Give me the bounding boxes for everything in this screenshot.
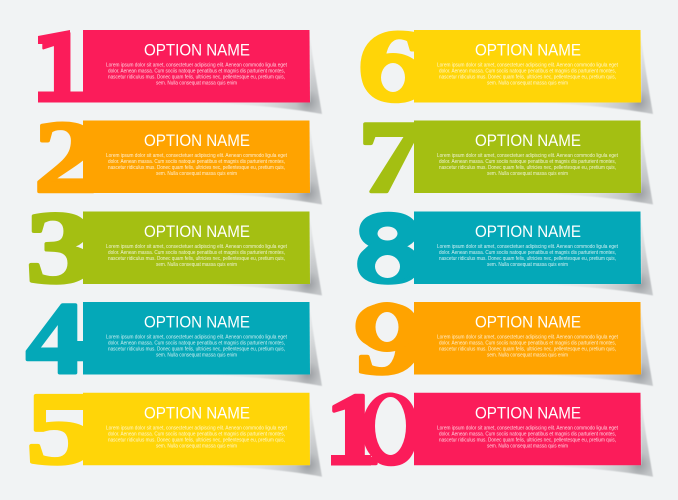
body text 5: sem. Nulla consequat massa quis enim [156, 443, 237, 449]
panel: option 10 [325, 373, 653, 486]
number 2: 2 [34, 101, 98, 214]
ribbon 1 [83, 30, 322, 114]
number 8: 8 [355, 191, 422, 304]
body text 6: Lorem ipsum dolor sit amet, consectetuer adipiscing elit. Aenean commodo ligula eget [437, 63, 619, 69]
panel: option 9 [354, 282, 653, 396]
body text 7: sem. Nulla consequat massa quis enim [487, 171, 568, 177]
heading 1: OPTION NAME [144, 41, 250, 60]
heading 6: OPTION NAME [475, 41, 581, 60]
body text 6: dolor. Aenean massa. Cum sociis natoque penatibus et magnis dis parturient montes, [439, 69, 616, 75]
number 6: 6 [358, 10, 428, 123]
number 9: 9 [354, 282, 424, 396]
body text 1: sem. Nulla consequat massa quis enim [156, 81, 237, 87]
body text 9: dolor. Aenean massa. Cum sociis natoque penatibus et magnis dis parturient montes, [439, 341, 616, 347]
body text 5: dolor. Aenean massa. Cum sociis natoque penatibus et magnis dis parturient montes, [108, 431, 285, 437]
body text 1 [106, 63, 288, 87]
body text 4: dolor. Aenean massa. Cum sociis natoque penatibus et magnis dis parturient montes, [108, 341, 285, 347]
ribbon 6 [414, 30, 653, 114]
body text 8: dolor. Aenean massa. Cum sociis natoque penatibus et magnis dis parturient montes, [439, 250, 616, 256]
panel: option 5 [26, 372, 322, 486]
panel: option 8 [355, 191, 653, 304]
body text 9: sem. Nulla consequat massa quis enim [487, 353, 568, 359]
body text 10: dolor. Aenean massa. Cum sociis natoque penatibus et magnis dis parturient montes, [439, 431, 616, 437]
body text 10 [437, 425, 619, 449]
body text 4 [106, 335, 288, 359]
body text 3: Lorem ipsum dolor sit amet, consectetuer adipiscing elit. Aenean commodo ligula eget [106, 244, 288, 250]
heading 9: OPTION NAME [475, 313, 581, 332]
heading 4: OPTION NAME [144, 313, 250, 332]
heading 7: OPTION NAME [475, 131, 581, 150]
heading 3: OPTION NAME [144, 222, 250, 241]
panel: option 1 [35, 10, 322, 124]
ribbon 4 [83, 302, 322, 386]
heading 10: OPTION NAME [475, 403, 581, 422]
body text 8 [437, 244, 619, 268]
heading 2: OPTION NAME [144, 131, 250, 150]
body text 9: nascetur ridiculus mus. Donec quam felis, ultricies nec, pellentesque eu, pretium quis, [439, 347, 616, 353]
body text 3: nascetur ridiculus mus. Donec quam felis, ultricies nec, pellentesque eu, pretium quis, [108, 256, 285, 262]
number 10: 10 [325, 373, 420, 486]
ribbon 9 [414, 302, 653, 386]
body text 2: dolor. Aenean massa. Cum sociis natoque penatibus et magnis dis parturient montes, [108, 159, 285, 165]
body text 6: nascetur ridiculus mus. Donec quam felis, ultricies nec, pellentesque eu, pretium quis, [439, 75, 616, 81]
ribbon 3 [83, 212, 322, 296]
body text 2: nascetur ridiculus mus. Donec quam felis, ultricies nec, pellentesque eu, pretium quis, [108, 165, 285, 171]
number 7: 7 [358, 101, 422, 214]
panel: option 7 [358, 101, 653, 214]
body text 2: Lorem ipsum dolor sit amet, consectetuer adipiscing elit. Aenean commodo ligula eget [106, 153, 288, 159]
body text 7: dolor. Aenean massa. Cum sociis natoque penatibus et magnis dis parturient montes, [439, 159, 616, 165]
body text 4: Lorem ipsum dolor sit amet, consectetuer adipiscing elit. Aenean commodo ligula eget [106, 335, 288, 341]
body text 3: sem. Nulla consequat massa quis enim [156, 262, 237, 268]
body text 8: sem. Nulla consequat massa quis enim [487, 262, 568, 268]
panel: option 6 [358, 10, 653, 123]
body text 9: Lorem ipsum dolor sit amet, consectetuer adipiscing elit. Aenean commodo ligula eget [437, 335, 619, 341]
number 1: 1 [35, 10, 86, 124]
ribbon 5 [83, 393, 322, 477]
body text 10: sem. Nulla consequat massa quis enim [487, 443, 568, 449]
ribbon 10 [414, 393, 653, 477]
body text 10: nascetur ridiculus mus. Donec quam felis, ultricies nec, pellentesque eu, pretium quis, [439, 437, 616, 443]
body text 7: nascetur ridiculus mus. Donec quam felis, ultricies nec, pellentesque eu, pretium quis, [439, 165, 616, 171]
body text 1: Lorem ipsum dolor sit amet, consectetuer adipiscing elit. Aenean commodo ligula eget [106, 63, 288, 69]
body text 2 [106, 153, 288, 177]
heading 5: OPTION NAME [144, 403, 250, 422]
body text 1: dolor. Aenean massa. Cum sociis natoque penatibus et magnis dis parturient montes, [108, 69, 285, 75]
heading 8: OPTION NAME [475, 222, 581, 241]
number 4: 4 [26, 282, 85, 396]
ribbon 2 [83, 120, 322, 204]
body text 8: nascetur ridiculus mus. Donec quam felis, ultricies nec, pellentesque eu, pretium quis, [439, 256, 616, 262]
ribbon 7 [414, 120, 653, 204]
body text 3: dolor. Aenean massa. Cum sociis natoque penatibus et magnis dis parturient montes, [108, 250, 285, 256]
body text 9 [437, 335, 619, 359]
body text 8: Lorem ipsum dolor sit amet, consectetuer adipiscing elit. Aenean commodo ligula eget [437, 244, 619, 250]
body text 6: sem. Nulla consequat massa quis enim [487, 81, 568, 87]
body text 7 [437, 153, 619, 177]
body text 5 [106, 425, 288, 449]
body text 4: nascetur ridiculus mus. Donec quam felis, ultricies nec, pellentesque eu, pretium quis, [108, 347, 285, 353]
panel: option 4 [26, 282, 322, 396]
body text 10: Lorem ipsum dolor sit amet, consectetuer adipiscing elit. Aenean commodo ligula eget [437, 425, 619, 431]
body text 1: nascetur ridiculus mus. Donec quam felis, ultricies nec, pellentesque eu, pretium quis, [108, 75, 285, 81]
number 5: 5 [26, 372, 96, 486]
panel: option 2 [34, 101, 322, 214]
body text 6 [437, 63, 619, 87]
body text 5: nascetur ridiculus mus. Donec quam felis, ultricies nec, pellentesque eu, pretium quis, [108, 437, 285, 443]
body text 5: Lorem ipsum dolor sit amet, consectetuer adipiscing elit. Aenean commodo ligula eget [106, 425, 288, 431]
number 3: 3 [26, 191, 94, 305]
body text 4: sem. Nulla consequat massa quis enim [156, 353, 237, 359]
body text 3 [106, 244, 288, 268]
body text 7: Lorem ipsum dolor sit amet, consectetuer adipiscing elit. Aenean commodo ligula eget [437, 153, 619, 159]
panel: option 3 [26, 191, 322, 305]
body text 2: sem. Nulla consequat massa quis enim [156, 171, 237, 177]
ribbon 8 [414, 212, 653, 296]
